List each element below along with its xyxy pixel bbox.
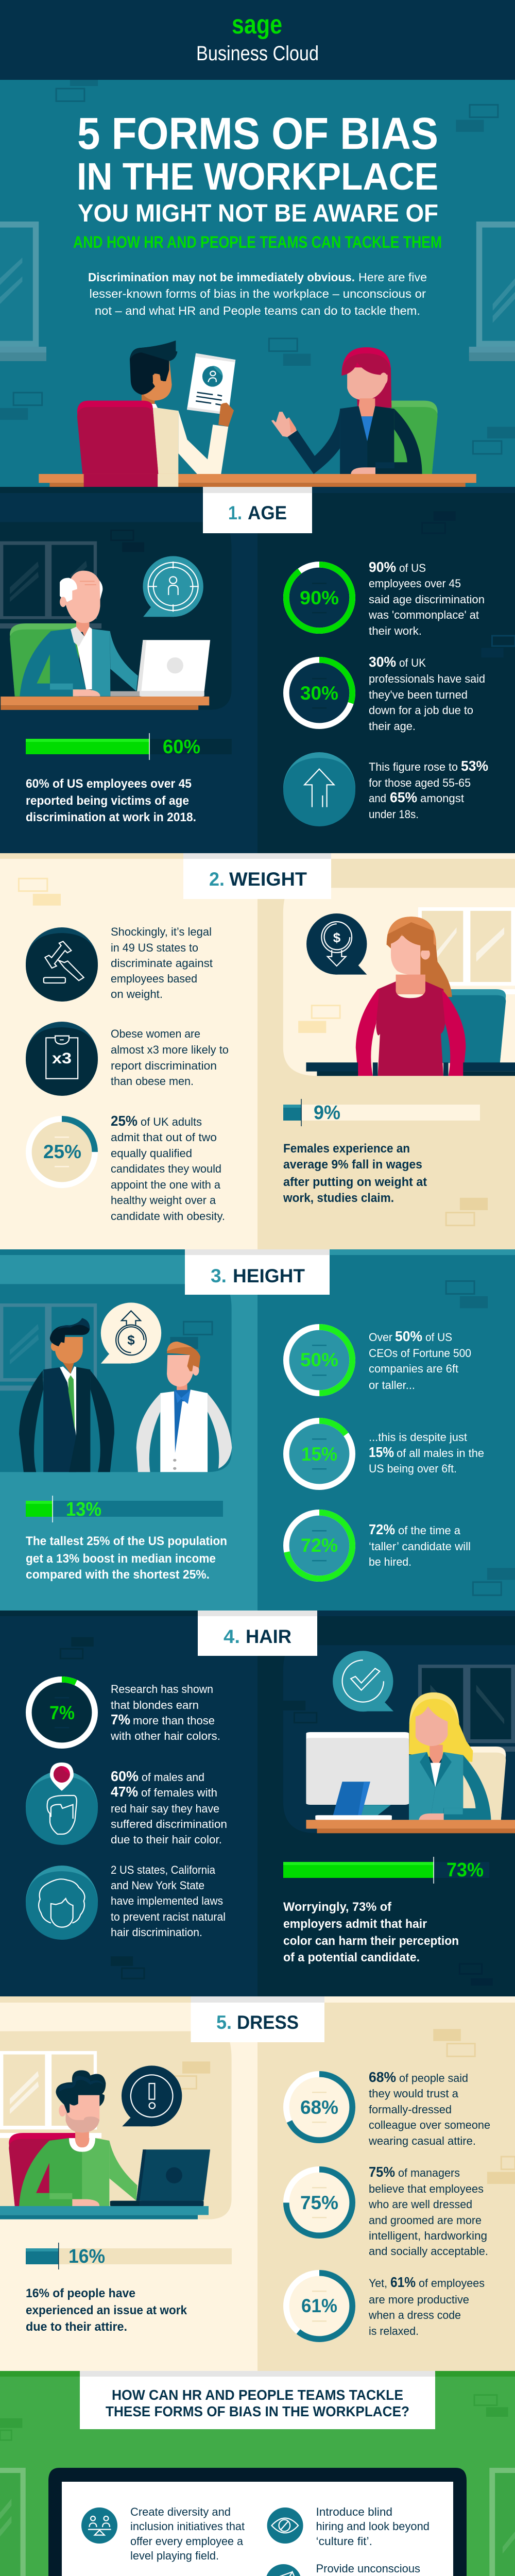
- text: just 15%: 15%: [369, 1444, 394, 1460]
- desktop monitor: [306, 1732, 409, 1820]
- blonde woman: [409, 1692, 491, 1820]
- title: 5 FORMS OF BIAS: [77, 109, 438, 159]
- text: 2 US states: to prevent racist natural: [111, 1910, 226, 1923]
- text: introduce blind: ‘culture fit’.: [316, 2535, 372, 2548]
- man with resume: [130, 341, 235, 487]
- text: over 50%: or taller...: [369, 1379, 415, 1392]
- ring: 30%: [286, 660, 352, 726]
- ring: 7%: 7%: [49, 1702, 75, 1723]
- text: provide training: Provide unconscious: [316, 2562, 420, 2575]
- desk: [306, 1062, 515, 1076]
- text: create diversity: inclusion initiatives that: [130, 2520, 245, 2533]
- illustration: casual man at laptop: [0, 2029, 515, 2219]
- older man: [20, 571, 138, 697]
- text: 30% of UK professionals: of UK: [399, 656, 426, 669]
- bar chart: 9%: 9%: [314, 1102, 340, 1124]
- text: 72% of the time: ‘taller’ candidate will: [369, 1540, 471, 1553]
- illustration: two men: [0, 1281, 515, 1595]
- desk: [306, 1820, 515, 1833]
- tab heading: 5. dress: [191, 1996, 324, 2042]
- ring: 68%: [286, 2074, 352, 2140]
- text: just 15%: ...this is despite just: [369, 1431, 468, 1444]
- ring: 90%: 90%: [300, 587, 339, 608]
- tab heading: 1. age: [203, 487, 312, 533]
- bearded man: [19, 2070, 138, 2206]
- text: worryingly: Worryingly, 73% of: [283, 1900, 392, 1914]
- text: 72% of the time: 72%: [369, 1521, 395, 1537]
- text: 61% of employees: is relaxed.: [369, 2325, 419, 2337]
- text: 25% of UK adults: admit that out of two: [111, 1131, 217, 1144]
- text: red hair: 60%: [111, 1768, 139, 1784]
- text: 68% of people: they would trust a: [369, 2087, 458, 2100]
- text: create diversity: offer every employee a: [130, 2535, 243, 2548]
- text: 75% of managers: of managers: [398, 2166, 460, 2179]
- tab heading: 4. hair: HAIR: [246, 1626, 291, 1647]
- text: the tallest: compared with the shortest 25%.: [26, 1568, 210, 1582]
- text: red hair: red hair say they have: [111, 1802, 219, 1815]
- bar chart: 16%: [26, 2243, 232, 2269]
- icon: inclusion balance: [81, 2507, 117, 2544]
- panel: section 2 weight: $: [333, 930, 341, 945]
- text: females experience: after putting on weight at: [283, 1175, 427, 1189]
- panel: section 6 how to tackle: [0, 2371, 515, 2576]
- text: 90% of US employees: employees over 45: [369, 577, 461, 590]
- text: 68% of people: colleague over someone: [369, 2119, 490, 2131]
- text: 72% of the time: of the time a: [398, 1524, 460, 1537]
- text: 75% of managers: and socially acceptable.: [369, 2245, 488, 2258]
- text: 61% of employees: when a dress code: [368, 2309, 461, 2321]
- text: legal: discriminate against: [111, 957, 213, 970]
- illustration: woman at computer: [60, 1637, 515, 1986]
- decor: green windows: [0, 2468, 515, 2576]
- tab heading: 3. height: [185, 1249, 330, 1295]
- icon: up arrow: [283, 752, 355, 826]
- text: blondes earn: more than those: [133, 1714, 215, 1727]
- text: red hair: [111, 1768, 227, 1846]
- resume document: [187, 353, 235, 415]
- text: 68% of people: wearing casual attire.: [368, 2134, 476, 2147]
- text: females experience: average 9% fall in wages: [283, 1158, 422, 1172]
- intro paragraph: not – and what HR and People teams can do to tackle them.: [95, 304, 420, 317]
- title: [73, 109, 442, 251]
- monitor: [48, 2468, 467, 2576]
- green chair: [10, 623, 79, 697]
- text: 30% of UK professionals: professionals have said: [369, 672, 485, 685]
- text: this figure rose: for those aged 55-65: [369, 776, 471, 789]
- text: create diversity: Create diversity and: [130, 2505, 231, 2518]
- text: 75% of managers: [368, 2164, 488, 2258]
- ring: 25%: 25%: [43, 1141, 81, 1162]
- text: 68% of people: of people said: [399, 2072, 468, 2084]
- text: the tallest: [26, 1534, 227, 1582]
- text: just 15%: of all males in the: [397, 1447, 484, 1460]
- ring: 75%: [286, 2170, 352, 2235]
- text: 90% of US employees: of US: [399, 562, 426, 574]
- icon: gavel: [26, 927, 98, 1002]
- ring: 15%: [286, 1421, 352, 1487]
- text: 25% of UK adults: equally qualified: [111, 1147, 192, 1160]
- text: 75% of managers: 75%: [369, 2164, 395, 2180]
- title: IN THE WORKPLACE: [77, 155, 438, 198]
- text: 61% of employees: 61%: [390, 2274, 416, 2290]
- text: just 15%: US being over 6ft.: [369, 1462, 457, 1475]
- text: females experience: Females experience an: [283, 1142, 410, 1156]
- text: legal: employees based: [111, 972, 197, 985]
- text: over 50%: companies are 6ft: [369, 1362, 459, 1375]
- text: females experience: [283, 1142, 427, 1205]
- text: over 50%: Over: [369, 1331, 392, 1344]
- text: worryingly: of a potential candidate.: [283, 1951, 420, 1964]
- text: 68% of people: [368, 2069, 490, 2147]
- green chair: [391, 401, 438, 474]
- text: blondes earn: Research has shown: [111, 1683, 213, 1696]
- panel: section 5 dress: [0, 1996, 515, 2371]
- text: 30% of UK professionals: they've been turned: [369, 688, 468, 701]
- text: this figure rose: [369, 758, 488, 821]
- text: obese women: [111, 1027, 229, 1088]
- icon: eye: [267, 2507, 303, 2544]
- panel: section 3 height: [0, 1249, 515, 1611]
- text: introduce blind: [316, 2505, 430, 2548]
- illustration: job interview: [39, 341, 476, 487]
- ring: 30%: 30%: [300, 683, 338, 704]
- header band: [0, 0, 515, 80]
- text: red hair: of males and: [142, 1771, 204, 1784]
- text: 60% of employees: 60% of US employees over 45: [26, 777, 192, 791]
- desk: [0, 2206, 209, 2219]
- text: introduce blind: Introduce blind: [316, 2505, 392, 2518]
- text: worryingly: color can harm their perception: [283, 1934, 459, 1948]
- bar chart: 60%: [26, 733, 232, 760]
- panel: intro: [0, 80, 515, 487]
- text: 25% of UK adults: candidates they would: [111, 1162, 221, 1175]
- ring: 7%: [29, 1680, 95, 1745]
- text: 75% of managers: intelligent, hardworking: [369, 2229, 487, 2242]
- tab heading: how to tackle: THESE FORMS OF BIAS IN THE WORKPLACE?: [106, 2403, 409, 2419]
- title: AND HOW HR AND PEOPLE TEAMS CAN TACKLE THEM: [73, 233, 442, 251]
- intro paragraph: [88, 270, 427, 317]
- tab heading: how to tackle: [80, 2371, 435, 2429]
- ring: 75%: 75%: [300, 2192, 338, 2213]
- text: 16% of people: experienced an issue at work: [26, 2303, 187, 2317]
- tab heading: 5. dress: 5.: [216, 2012, 232, 2033]
- tab heading: 5. dress: DRESS: [237, 2012, 299, 2033]
- text: 61% of employees: [368, 2274, 485, 2337]
- decor: left and right windows: [0, 222, 515, 361]
- ring: 50%: [286, 1327, 352, 1393]
- tab heading: 4. hair: [198, 1611, 317, 1656]
- text: this figure rose: This figure rose to: [369, 760, 458, 773]
- ring: 15%: 15%: [301, 1444, 337, 1465]
- logo: sage Business Cloud: sage: [232, 10, 282, 40]
- text: 2 US states: 2 US states, California: [111, 1863, 215, 1876]
- ring: 68%: 68%: [300, 2097, 338, 2118]
- intro paragraph: Here are five: [358, 270, 427, 284]
- icon: warning bubble: [122, 2065, 182, 2126]
- text: 2 US states: [111, 1863, 226, 1939]
- ring: 61%: [286, 2273, 352, 2339]
- text: 61% of employees: Yet,: [369, 2277, 387, 2290]
- laptop: [110, 640, 210, 697]
- icon: natural hair head: [26, 1866, 98, 1940]
- text: 2 US states: have implemented laws: [111, 1894, 223, 1907]
- text: 25% of UK adults: of UK adults: [141, 1115, 202, 1128]
- text: 90% of US employees: their work.: [369, 624, 422, 637]
- tab heading: 1. age: AGE: [248, 502, 287, 523]
- text: 75% of managers: and groomed are more: [369, 2214, 482, 2227]
- bar chart: 60%: 60%: [163, 736, 200, 758]
- tab heading: how to tackle: HOW CAN HR AND PEOPLE TEAMS TACKLE: [112, 2387, 403, 2403]
- tab heading: 2. weight: [183, 853, 331, 899]
- text: 60% of employees: reported being victims of age: [26, 794, 189, 808]
- text: obese women: almost x3 more likely to: [111, 1043, 229, 1056]
- text: red hair: of females with: [141, 1786, 217, 1799]
- icon: x3 clipboard: x3: [52, 1050, 72, 1067]
- laptop: [110, 2149, 210, 2206]
- panel: section 1 age: [0, 487, 515, 853]
- text: 75% of managers: believe that employees: [369, 2182, 484, 2195]
- text: 60% of employees: [26, 777, 196, 824]
- intro paragraph: Discrimination may not be immediately obvious.: [88, 270, 355, 284]
- text: blondes earn: [110, 1683, 220, 1742]
- text: 25% of UK adults: [111, 1113, 225, 1223]
- tab heading: 3. height: HEIGHT: [233, 1265, 305, 1286]
- text: blondes earn: that blondes earn: [111, 1699, 199, 1711]
- text: this figure rose: 53%: [461, 758, 488, 774]
- text: introduce blind: hiring and look beyond: [316, 2520, 430, 2533]
- text: over 50%: of US: [425, 1331, 452, 1344]
- icon: scales: [265, 2564, 301, 2576]
- text: 16% of people: due to their attire.: [26, 2320, 127, 2334]
- panel: section 4 hair: [0, 1611, 515, 1996]
- teal chair: [440, 989, 506, 1063]
- text: 2 US states: and New York State: [111, 1879, 204, 1892]
- text: 30% of UK professionals: 30%: [369, 654, 396, 670]
- text: females experience: work, studies claim.: [283, 1191, 394, 1205]
- text: just 15%: [369, 1431, 484, 1475]
- text: this figure rose: 65%: [390, 789, 417, 805]
- text: legal: on weight.: [111, 988, 163, 1001]
- icon: checkmark bubble: [333, 1651, 393, 1711]
- illustration: older man at laptop: [0, 511, 515, 710]
- text: 25% of UK adults: healthy weight over a: [111, 1194, 216, 1207]
- cream chair: [463, 1747, 506, 1820]
- text: worryingly: employers admit that hair: [283, 1917, 427, 1931]
- text: 25% of UK adults: appoint the one with a: [111, 1178, 220, 1191]
- text: 68% of people: 68%: [369, 2069, 396, 2085]
- ring: 25%: [29, 1119, 95, 1185]
- woman figure: [356, 917, 466, 1076]
- icon: rising money bubble: [101, 1302, 161, 1364]
- text: obese women: Obese women are: [111, 1027, 200, 1040]
- table: [39, 474, 476, 487]
- text: legal: [111, 925, 213, 1001]
- text: this figure rose: and: [369, 792, 386, 805]
- text: this figure rose: under 18s.: [369, 808, 419, 821]
- illustration: woman: [19, 878, 515, 1226]
- text: the tallest: get a 13% boost in median income: [26, 1552, 216, 1566]
- panel: section 3 height: $: [127, 1332, 135, 1348]
- crimson chair: [9, 2133, 79, 2206]
- text: 75% of managers: who are well dressed: [368, 2198, 472, 2211]
- shorter man in white: [136, 1342, 232, 1472]
- bar chart: 73%: 73%: [447, 1859, 484, 1881]
- tab heading: 2. weight: WEIGHT: [229, 869, 307, 890]
- ring: 61%: 61%: [301, 2295, 337, 2316]
- text: worryingly: [283, 1900, 459, 1964]
- text: 61% of employees: of employees: [419, 2277, 485, 2290]
- text: 16% of people: 16% of people have: [26, 2286, 135, 2300]
- panel: section 2 weight: [0, 853, 515, 1249]
- text: 25% of UK adults: 25%: [111, 1113, 138, 1129]
- text: 68% of people: formally-dressed: [369, 2103, 452, 2116]
- tab heading: 3. height: 3.: [211, 1265, 227, 1286]
- intro paragraph: lesser-known forms of bias in the workplace – unconscious or: [90, 287, 426, 300]
- text: blondes earn: with other hair colors.: [110, 1730, 220, 1742]
- icon: red hair head: [26, 1762, 98, 1845]
- text: 61% of employees: are more productive: [369, 2293, 469, 2306]
- logo: sage Business Cloud: Business Cloud: [196, 42, 319, 65]
- text: 90% of US employees: [368, 559, 485, 637]
- text: 90% of US employees: said age discrimination: [369, 593, 485, 606]
- text: obese women: than obese men.: [111, 1075, 194, 1088]
- title: YOU MIGHT NOT BE AWARE OF: [78, 200, 438, 227]
- text: 60% of employees: discrimination at work in 2018.: [26, 810, 196, 824]
- text: the tallest: The tallest 25% of the US population: [26, 1534, 227, 1548]
- text: 2 US states: hair discrimination.: [111, 1926, 202, 1939]
- text: red hair: 47%: [111, 1784, 138, 1800]
- logo: sage Business Cloud: [196, 10, 319, 65]
- text: create diversity: [130, 2505, 245, 2562]
- text: 30% of UK professionals: their age.: [369, 720, 416, 733]
- text: 72% of the time: be hired.: [369, 1555, 411, 1568]
- text: over 50%: [369, 1328, 471, 1392]
- crimson chair: [77, 401, 159, 487]
- tall man: [19, 1318, 114, 1472]
- text: blondes earn: 7%: [111, 1711, 130, 1727]
- ring: 50%: 50%: [300, 1349, 338, 1370]
- text: create diversity: level playing field.: [130, 2549, 219, 2562]
- tab heading: 1. age: 1.: [228, 502, 242, 523]
- text: over 50%: CEOs of Fortune 500: [369, 1347, 471, 1360]
- text: legal: Shockingly, it’s legal: [111, 925, 212, 938]
- text: over 50%: 50%: [395, 1328, 422, 1344]
- bar chart: 73%: [283, 1857, 489, 1884]
- bar chart: 13%: 13%: [66, 1499, 101, 1520]
- bar chart: 13%: [26, 1496, 223, 1522]
- text: 30% of UK professionals: [369, 654, 485, 733]
- text: obese women: report discrimination: [111, 1059, 217, 1072]
- text: this figure rose: amongst: [420, 792, 465, 805]
- bar chart: 16%: 16%: [68, 2246, 105, 2267]
- text: 25% of UK adults: candidate with obesity.: [111, 1210, 225, 1223]
- text: 90% of US employees: was 'commonplace' at: [368, 608, 479, 621]
- text: legal: in 49 US states to: [111, 941, 198, 954]
- desk: [1, 697, 209, 710]
- bar chart: 9%: [283, 1099, 480, 1126]
- icon: x3 clipboard: [26, 1022, 98, 1096]
- text: 72% of the time: [369, 1521, 471, 1568]
- tab heading: 2. weight: 2.: [209, 869, 225, 890]
- ring: 72%: [286, 1513, 352, 1579]
- text: 90% of US employees: 90%: [369, 559, 396, 575]
- ring: 90%: [286, 565, 352, 631]
- text: red hair: suffered discrimination: [111, 1818, 227, 1831]
- icon: falling money bubble: [306, 913, 367, 975]
- ring: 72%: 72%: [301, 1535, 338, 1556]
- text: 16% of people: [26, 2286, 187, 2334]
- icon: target bubble: [143, 556, 203, 617]
- woman interviewer: [271, 347, 422, 474]
- text: red hair: due to their hair color.: [111, 1833, 222, 1846]
- tab heading: 4. hair: 4.: [224, 1626, 240, 1647]
- text: 30% of UK professionals: down for a job due to: [369, 704, 473, 717]
